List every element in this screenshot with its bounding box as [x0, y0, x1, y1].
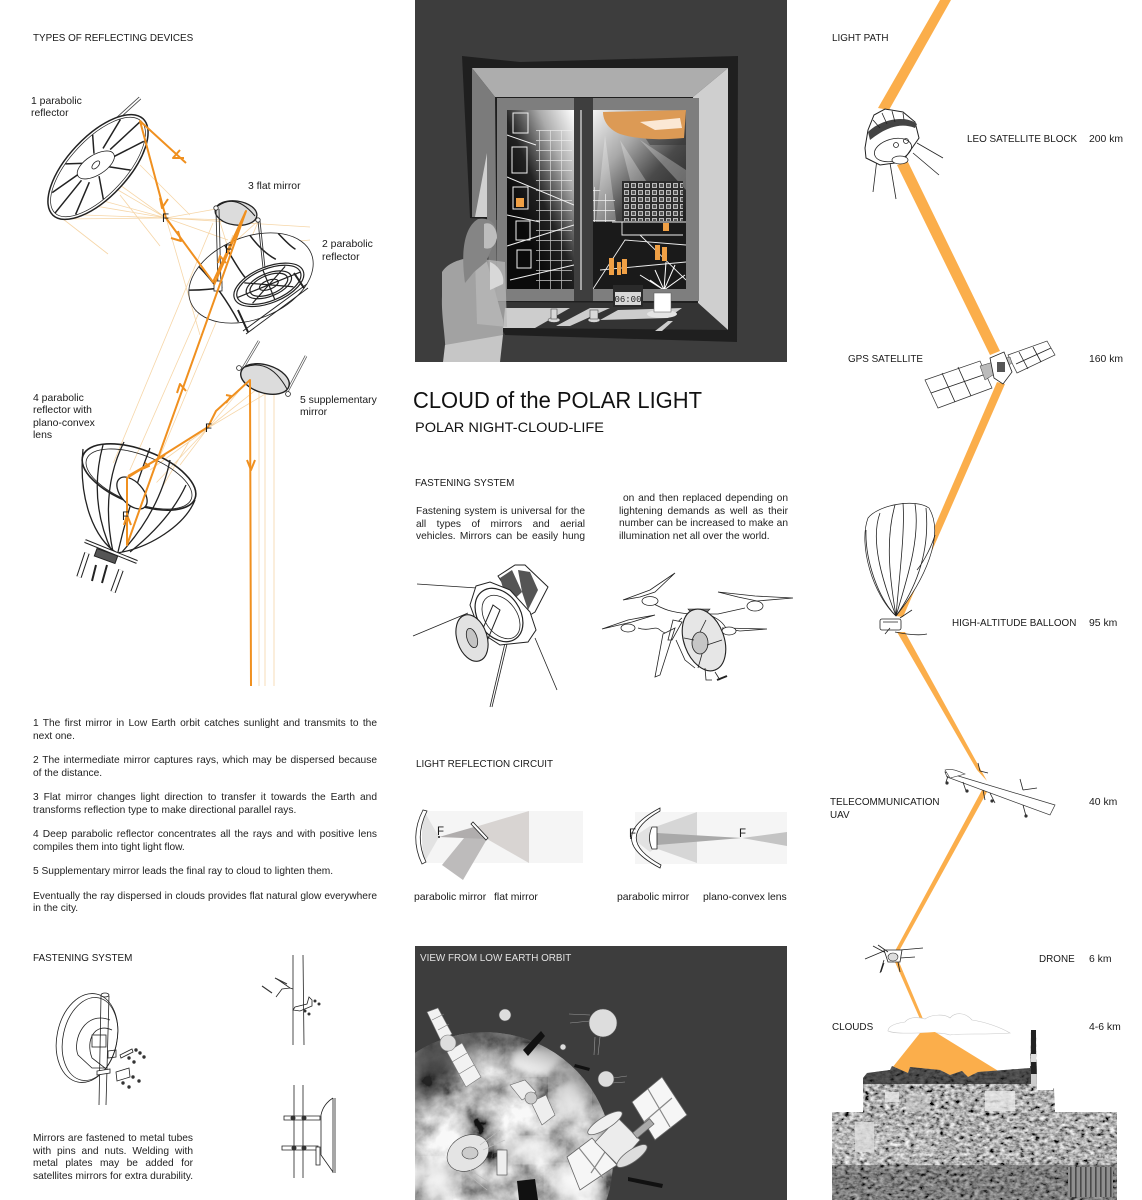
window reveal and frame	[462, 56, 738, 342]
circuit captions: parabolic mirror	[414, 892, 487, 903]
altitude labels: 40 km	[1089, 797, 1117, 808]
altitude labels: 200 km	[1089, 134, 1123, 145]
city photograph	[832, 1030, 1117, 1200]
circuit: parabolic and flat mirror	[416, 810, 583, 880]
mirror labels: 1 parabolic	[31, 96, 82, 107]
mirror labels: reflector with	[33, 405, 92, 416]
subtitle: POLAR NIGHT-CLOUD-LIFE	[415, 419, 604, 435]
text: mirror explanations: 2 The intermediate mirror captures rays, which may be dispersed because	[33, 755, 377, 766]
digital clock: 06:00	[614, 295, 642, 305]
text: mirrors fastened to tubes: with pins and nuts. Welding with	[33, 1146, 193, 1156]
light path heading: LIGHT PATH	[832, 33, 889, 44]
circuit captions: flat mirror	[494, 892, 538, 903]
altitude labels: DRONE	[1039, 954, 1075, 965]
LEO satellite block	[865, 109, 943, 199]
GPS satellite	[925, 341, 1055, 408]
text: fastening description, column 2	[619, 493, 788, 542]
dark wall background	[415, 0, 787, 362]
altitude labels: 6 km	[1089, 954, 1112, 965]
mirror 5: supplementary mirror	[237, 341, 306, 400]
text: mirrors fastened to tubes	[33, 1133, 193, 1182]
circuit: parabolic and flat mirror: F	[437, 826, 444, 838]
text: mirrors fastened to tubes: metal plates may be added for	[33, 1158, 193, 1169]
main title: CLOUD of the POLAR LIGHT	[413, 387, 702, 413]
text: mirror explanations: of the distance.	[33, 768, 102, 778]
drone with mirror	[602, 573, 793, 680]
text: fastening description, column 2: illumination net all over the world.	[619, 530, 770, 542]
main orange light ray with arrows	[124, 121, 255, 686]
small drone	[865, 945, 923, 973]
digital clock	[613, 285, 643, 307]
satellites: black distant	[517, 1031, 663, 1200]
text: mirror explanations: in the city.	[33, 903, 78, 914]
text: mirror explanations	[33, 718, 377, 914]
altitude labels: TELECOMMUNICATION	[830, 797, 940, 808]
mirror labels: lens	[33, 430, 52, 441]
altitude labels: GPS SATELLITE	[848, 354, 923, 365]
mirror labels: mirror	[300, 407, 328, 418]
mirror 2: parabolic reflector	[175, 216, 327, 340]
text: fastening description, column 2: lightening demands as well as their	[619, 506, 788, 516]
fastening drawing: side view mounting	[282, 1085, 335, 1178]
mirror labels: reflector	[31, 108, 69, 119]
text: mirror explanations: 4 Deep parabolic reflector concentrates all the rays and with positive lens	[33, 829, 377, 840]
fastening drawing: clamps on tube	[262, 955, 320, 1045]
text: fastening description, column 2: number can be increased to make an	[619, 518, 788, 529]
earth globe	[413, 1030, 620, 1200]
text: mirror explanations: 3 Flat mirror changes light direction to transfer it towards the Earth and	[33, 792, 377, 803]
left pane: night building with light	[507, 110, 574, 290]
mirror labels: 4 parabolic	[33, 393, 84, 404]
mirror 3: flat mirror	[214, 198, 265, 291]
altitude labels: 160 km	[1089, 354, 1123, 365]
text: mirror explanations: compiles them into tight light flow.	[33, 842, 185, 852]
fastening drawing: dish on tube	[48, 988, 146, 1105]
mirror 4: parabolic reflector with plano-convex lens	[73, 430, 205, 592]
mugs on sill	[548, 309, 600, 322]
focus labels: F	[205, 423, 212, 435]
light glow below clouds	[892, 1032, 1000, 1080]
text: mirror explanations: next one.	[33, 730, 75, 742]
satellite: large foreground	[567, 1077, 687, 1190]
satellite: upper left long wing	[427, 1008, 481, 1087]
altitude labels: 95 km	[1089, 618, 1117, 629]
mirror labels: reflector	[322, 252, 360, 263]
focus labels	[122, 213, 232, 523]
light path: orange beam segments	[878, 0, 1005, 1019]
heading: types of reflecting devices: TYPES OF REFLECTING DEVICES	[33, 33, 194, 44]
text: mirror explanations: 5 Supplementary mirror leads the final ray to cloud to lighten them.	[33, 866, 333, 877]
satellites: round small	[499, 1009, 627, 1087]
woman holding mug	[442, 219, 507, 362]
text: fastening description, column 1: Fastening system is universal for the	[416, 506, 585, 517]
mirror labels: 2 parabolic	[322, 239, 373, 250]
sunlight on window sill	[503, 308, 682, 331]
fastening system heading: FASTENING SYSTEM	[33, 953, 132, 964]
high-altitude balloon	[865, 503, 935, 635]
altitude labels: UAV	[830, 810, 850, 821]
mirror labels: 3 flat mirror	[248, 181, 301, 192]
satellite: bottom-left dish	[446, 1130, 508, 1190]
fastening system heading, centre column: FASTENING SYSTEM	[415, 478, 514, 489]
thin dispersed light rays	[57, 165, 310, 686]
text: mirror explanations: 1 The first mirror in Low Earth orbit catches sunlight and transmits to the	[33, 718, 377, 729]
text: mirror explanations: Eventually the ray dispersed in clouds provides flat natural glow everywhere	[33, 890, 377, 902]
circuit captions: plano-convex lens	[703, 892, 787, 903]
mirror labels: 5 supplementary	[300, 395, 378, 406]
focus labels: F	[162, 213, 169, 225]
text: fastening description, column 1: vehicles. Mirrors can be easily hung	[416, 531, 585, 542]
focus labels: F	[122, 511, 129, 523]
text: mirror explanations: transforms reflection type to make directional parallel rays.	[33, 804, 296, 816]
text: fastening description, column 2: on and then replaced depending on	[623, 493, 788, 504]
circuit: parabolic mirror and plano-convex lens: F	[739, 828, 746, 840]
circuit: parabolic mirror and plano-convex lens: F	[629, 828, 636, 840]
right pane: sky, cloud, rays, courtyard	[593, 110, 686, 290]
altitude labels: 4-6 km	[1089, 1022, 1121, 1033]
text: mirrors fastened to tubes: satellites mirrors for extra durability.	[33, 1170, 193, 1182]
text: mirrors fastened to tubes: Mirrors are fastened to metal tubes	[33, 1133, 193, 1144]
circuit: parabolic mirror and plano-convex lens	[629, 808, 787, 868]
diagram: mirrors and light rays	[31, 98, 327, 686]
altitude labels: HIGH-ALTITUDE BALLOON	[952, 618, 1076, 629]
altitude labels: CLOUDS	[832, 1022, 874, 1033]
altitude labels	[830, 134, 1123, 1033]
mirror labels	[31, 96, 378, 441]
altitude labels: LEO SATELLITE BLOCK	[967, 134, 1078, 145]
light reflection circuit heading: LIGHT REFLECTION CIRCUIT	[416, 759, 553, 770]
mirror 1: parabolic reflector	[31, 98, 165, 236]
circuit captions: parabolic mirror	[617, 892, 690, 903]
potted plant	[647, 293, 677, 318]
mirror labels: plano-convex	[33, 418, 96, 429]
satellite with mirror	[413, 565, 557, 707]
text: fastening description, column 1	[416, 506, 585, 542]
clouds outline	[888, 1014, 1010, 1035]
hero illustration: window at polar night	[415, 0, 787, 362]
satellite: mid wing	[510, 1080, 555, 1125]
text: fastening description, column 1: all types of mirrors and aerial	[416, 518, 585, 530]
panel: view from low earth orbit	[413, 946, 787, 1200]
telecommunication UAV	[945, 763, 1055, 818]
heading on dark panel: VIEW FROM LOW EARTH ORBIT	[420, 953, 571, 964]
focus labels: F	[225, 244, 232, 256]
circuit captions	[414, 892, 787, 903]
